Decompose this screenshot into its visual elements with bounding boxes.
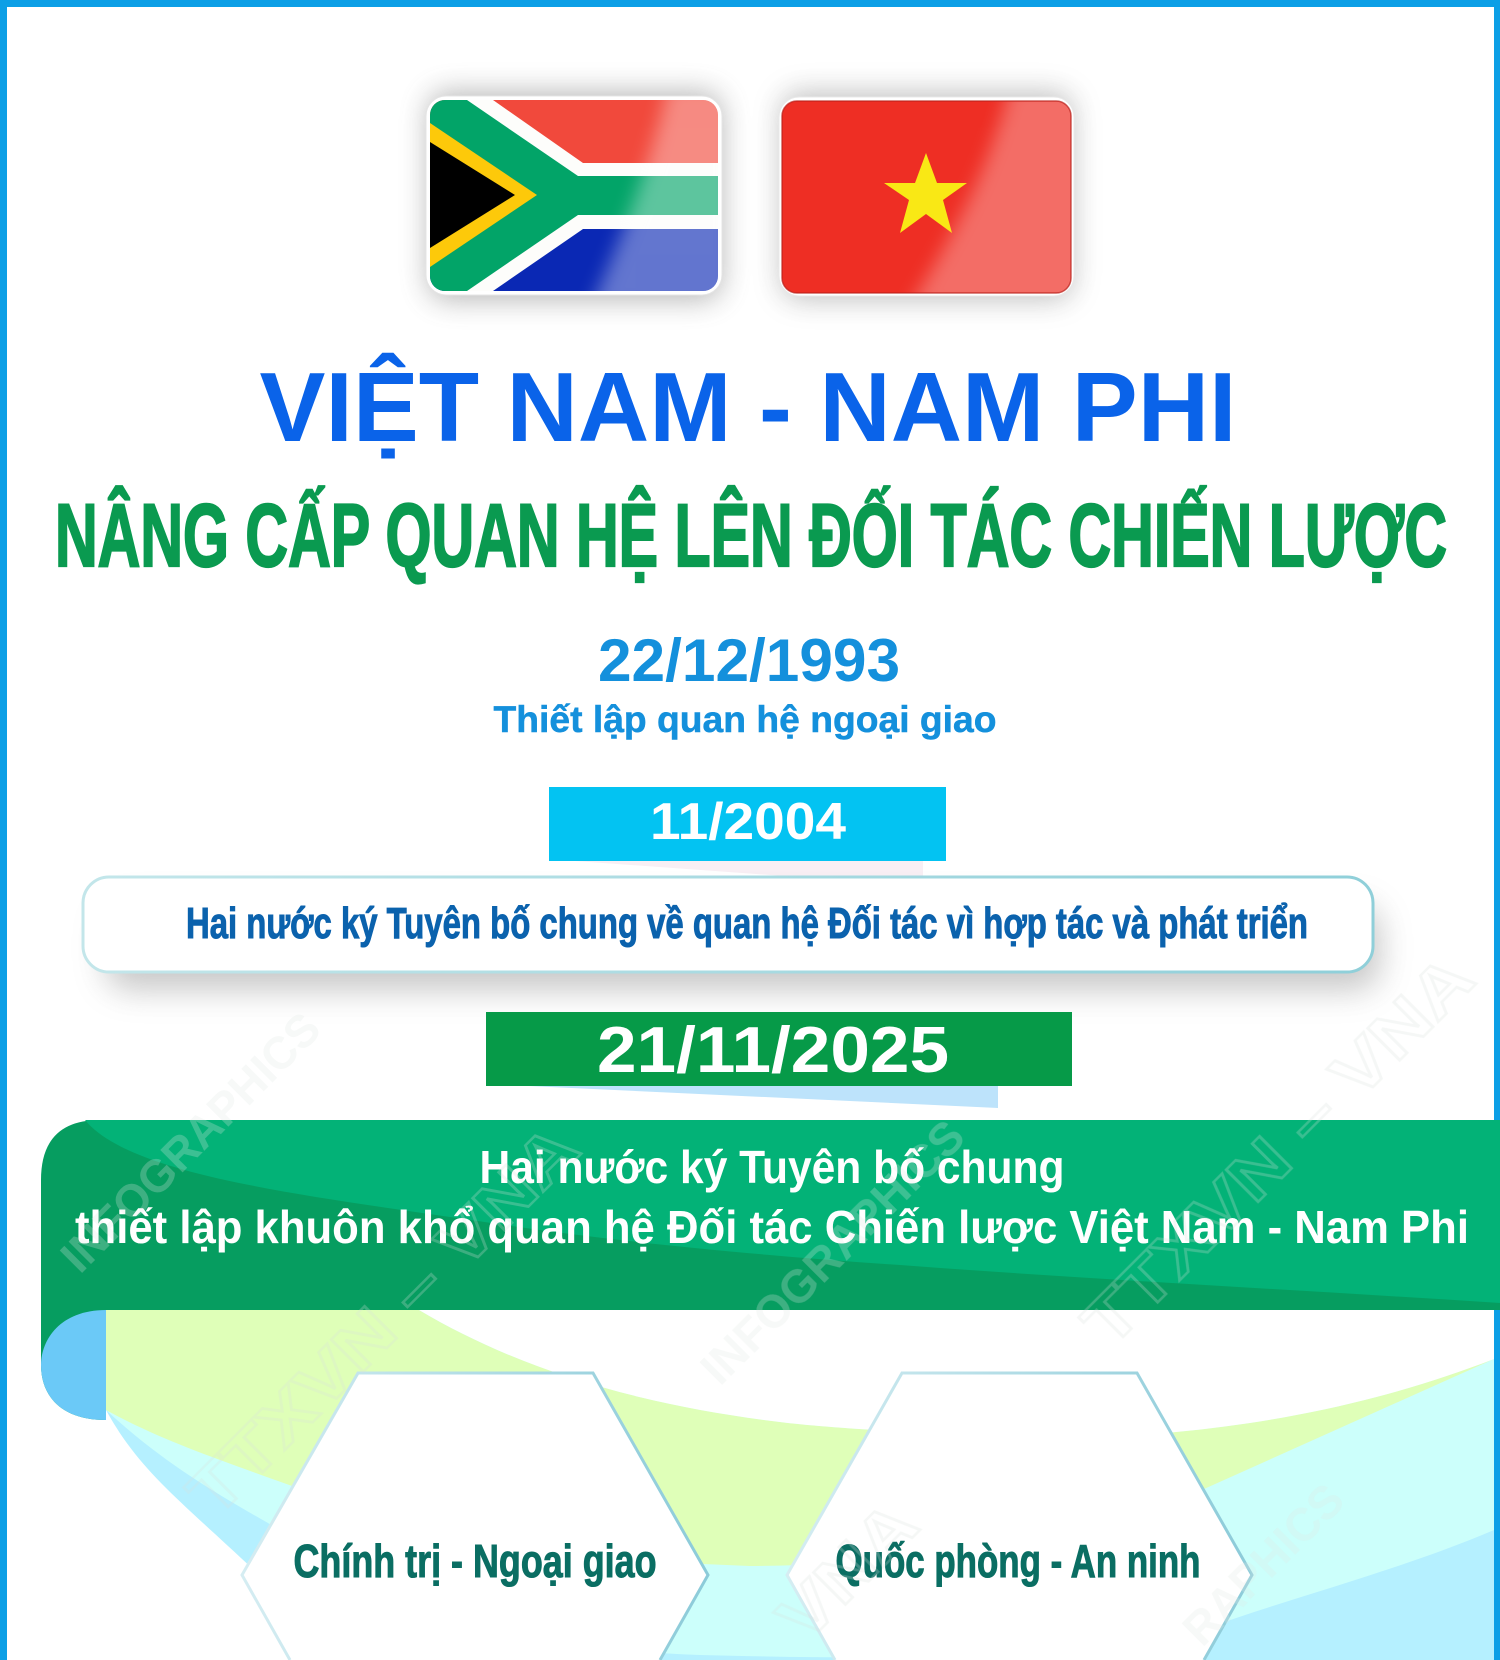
watermarks: INFOGRAPHICS: [50, 1002, 330, 1282]
watermarks: INFOGRAPHICS: [690, 1110, 975, 1394]
hexagon: defence and security: [787, 1373, 1252, 1660]
banner curl: [41, 1310, 106, 1420]
milestone 1993: description: Thiết lập quan hệ ngoại giao: [494, 699, 996, 740]
decorative wedge under 2004 label: [575, 861, 923, 886]
hexagon: politics and diplomacy: Chính trị - Ngoại giao: [294, 1535, 656, 1587]
title: main heading: VIỆT NAM - NAM PHI: [260, 352, 1236, 462]
watermarks: TTXVN – VNA: [173, 1110, 593, 1530]
label: 11/2004: [549, 787, 946, 861]
label: 21/11/2025: [486, 1012, 1072, 1086]
label: 11/2004: 11/2004: [650, 793, 846, 851]
banner heading line 1: Hai nước ký Tuyên bố chung: [480, 1141, 1064, 1193]
label: 21/11/2025: 21/11/2025: [597, 1013, 949, 1086]
decorative wedge under 2025 label: [529, 1086, 998, 1108]
milestone 1993: date: 22/12/1993: [598, 627, 900, 694]
watermarks: TTXVN – VNA: [1068, 940, 1488, 1360]
flag: Vietnam: [779, 85, 1090, 310]
flag: South Africa: [426, 85, 735, 310]
card: 2004 statement: [83, 877, 1373, 972]
hexagon: defence and security: Quốc phòng - An ninh: [836, 1535, 1200, 1587]
banner heading line 2: thiết lập khuôn khổ quan hệ Đối tác Chiến lược Việt Nam - Nam Phi: [75, 1201, 1469, 1253]
watermarks: [50, 940, 1488, 1655]
icon: yellow star: [884, 153, 967, 233]
hexagon: politics and diplomacy: [242, 1373, 708, 1660]
watermarks: VNA: [763, 1486, 932, 1655]
card: 2004 shadow: [105, 905, 1380, 990]
background waves: [106, 1300, 1494, 1660]
banner: agreement statement: [41, 1120, 1500, 1420]
watermarks: RAPHICS: [1172, 1473, 1354, 1655]
